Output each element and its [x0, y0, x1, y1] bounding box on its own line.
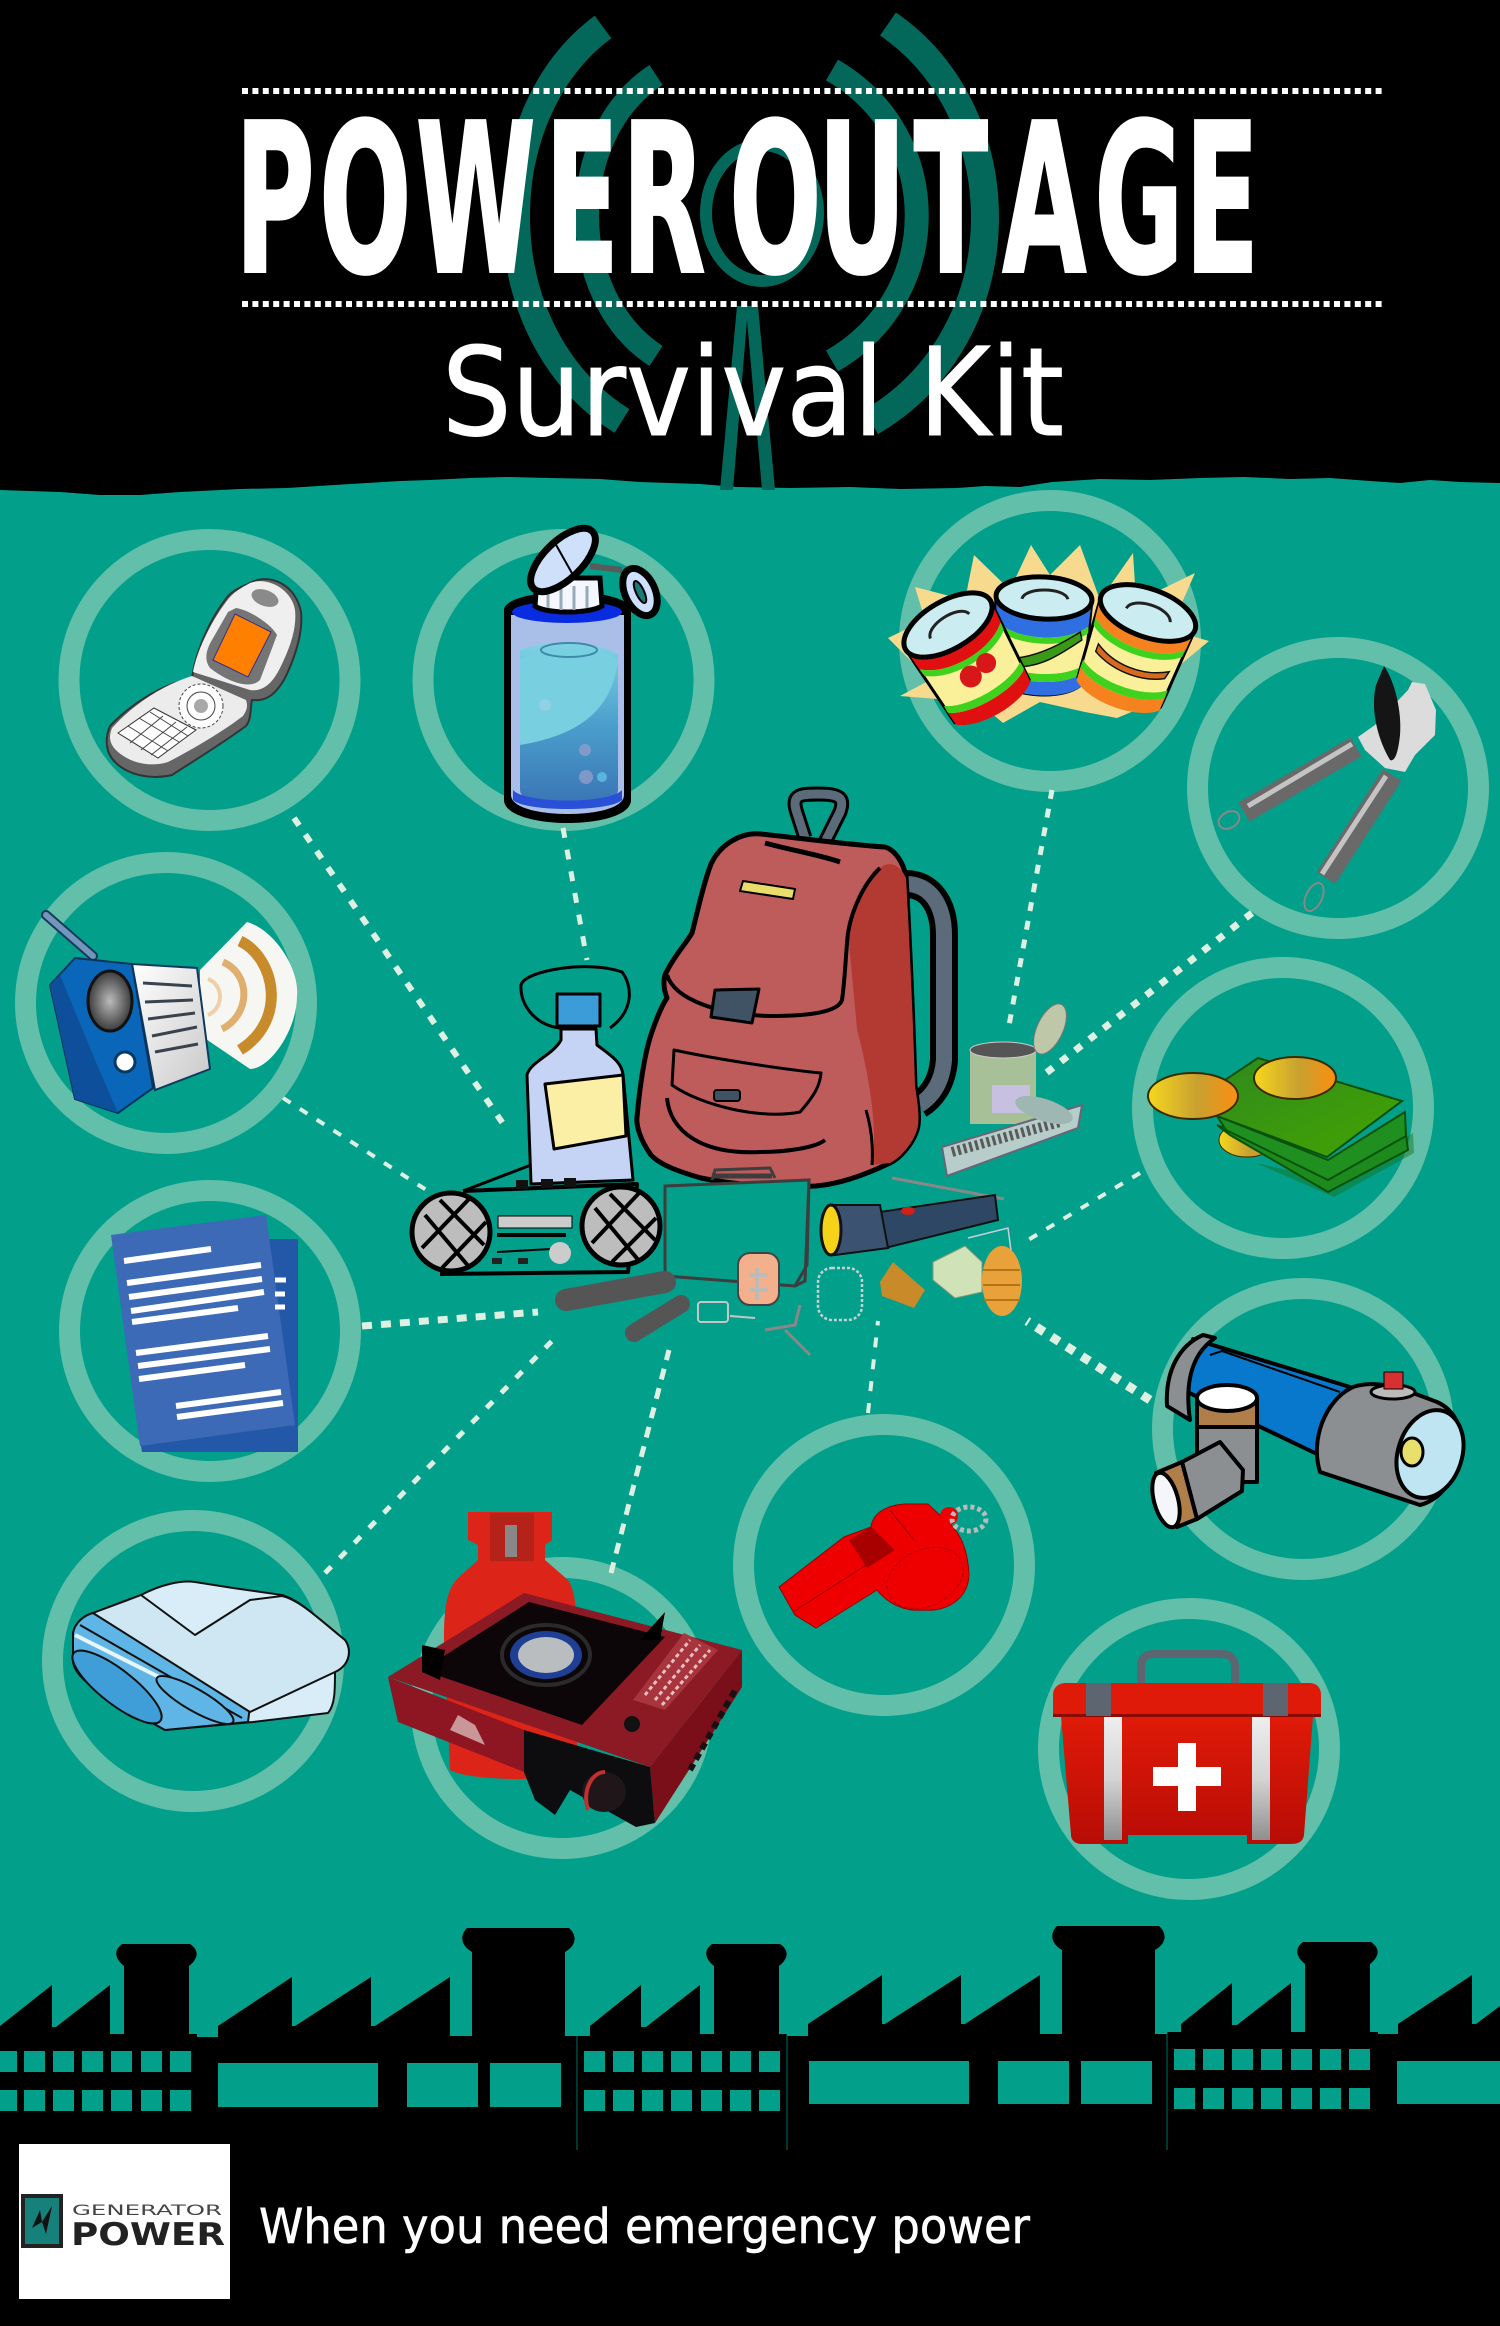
- icon: canned food: [888, 545, 1209, 738]
- text: tagline: When you need emergency power: [259, 2199, 1030, 2255]
- icon: folded blanket: [63, 1582, 349, 1734]
- icon: opened can and opener small: [942, 999, 1082, 1176]
- icon: radio tower signal behind title: [516, 24, 985, 490]
- icon: whistle: [779, 1504, 986, 1628]
- icon: generator power logo: GENERATOR: [72, 2203, 222, 2219]
- icon: water jug: [521, 967, 633, 1184]
- icon: flashlight and batteries: [1147, 1335, 1474, 1530]
- icon: generator power logo: POWER: [71, 2217, 225, 2253]
- panel: dotted connector lines: [283, 790, 1252, 1573]
- title: power outage: POWER OUTAGE: [235, 80, 1259, 320]
- icon: gas stove with cylinder: [388, 1512, 742, 1827]
- panel: item rings: [26, 500, 1478, 1890]
- icon: flip phone: [107, 579, 301, 777]
- icon: radio: [46, 915, 297, 1113]
- icon: cash and coins: [1148, 1057, 1414, 1197]
- panel: factory windows: [0, 2032, 1500, 2150]
- icon: money small: [933, 1228, 1022, 1316]
- icon: boombox: [412, 1165, 660, 1274]
- icon: flashlight small: [821, 1178, 1004, 1255]
- icon: whistle small: [880, 1262, 925, 1308]
- panel: black footer: [0, 2150, 1500, 2326]
- panel: factory skyline: [0, 1926, 1500, 2326]
- icon: empty first aid case: [665, 1168, 809, 1286]
- icon: tube small: [566, 1282, 681, 1333]
- icon: chain small: [818, 1268, 862, 1320]
- icon: keys small: [698, 1302, 810, 1355]
- panel: black header with torn edge: [0, 0, 1500, 495]
- icon: first aid kit: [1053, 1654, 1321, 1844]
- icon: backpack: [637, 794, 944, 1187]
- subtitle: survival kit: Survival Kit: [442, 322, 1064, 464]
- icon: can opener: [1215, 666, 1436, 914]
- icon: bandage roll: [738, 1253, 779, 1305]
- icon: documents: [111, 1215, 298, 1452]
- panel: assembled kit centre: [412, 794, 1082, 1355]
- icon: generator power logo: [19, 2144, 230, 2299]
- icon: water bottle: [504, 518, 664, 823]
